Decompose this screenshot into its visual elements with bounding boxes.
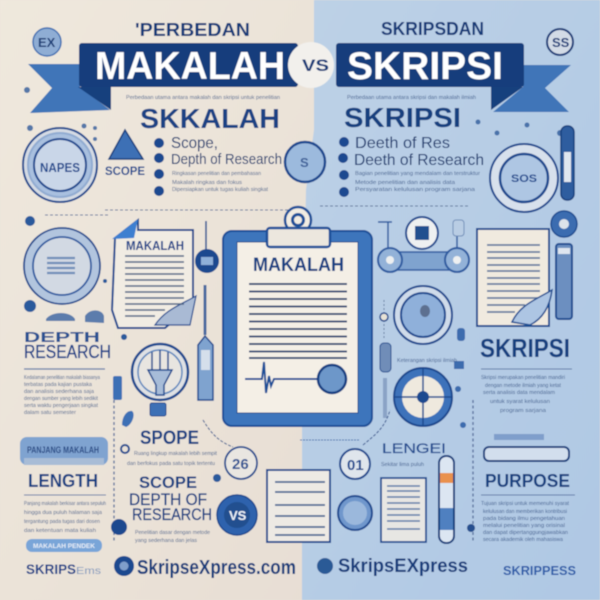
icon: clasp: [150, 403, 166, 416]
icon: tube: [198, 285, 213, 400]
icon: document: [381, 478, 426, 542]
heading: scope depth of research: DEPTH OF: [129, 490, 207, 509]
body text: Tujuan skripsi untuk memenuhi syarat: [481, 501, 570, 507]
heading: skripsi: SKRIPSI: [344, 102, 461, 133]
body text: Skripsi merupakan penelitian mandiri: [481, 375, 565, 381]
heading: scope depth of research: SCOPE: [139, 473, 197, 492]
heading: scope depth of research: RESEARCH: [132, 505, 212, 524]
bullet list: Depth of Research: [171, 151, 282, 168]
icon: bulb circle: [132, 344, 188, 400]
ribbon: right tail: [491, 65, 571, 112]
footer: right logo: SkripsEXpress: [338, 556, 468, 577]
rule: [24, 494, 106, 496]
icon: napes seal: NAPES: [40, 160, 80, 175]
bullet list: [154, 135, 282, 196]
icon: small decor: [213, 474, 221, 482]
icon: sos seal: SOS: [511, 173, 537, 185]
panel: purpose: [467, 434, 575, 543]
body text: Kedalaman penelitian makalah biasanya: [24, 375, 100, 381]
panel: right middle: [378, 211, 577, 428]
heading: purpose: PURPOSE: [485, 471, 570, 491]
body text: [481, 375, 565, 414]
body text: yang sederhana dan jelas: [135, 538, 198, 544]
footer: left logo: SkripseXpress.com: [137, 557, 296, 579]
icon: shield circle: [338, 496, 372, 530]
footer: right label: SKRIPPESS: [503, 563, 576, 578]
rule: [24, 368, 105, 370]
body text: Ruang lingkup makalah lebih sempit: [134, 451, 218, 457]
heading: scope depth of research: [129, 473, 212, 524]
background: left cream panel: [0, 0, 320, 600]
icon: tube horizontal: [484, 434, 569, 461]
rule: [481, 368, 572, 370]
icon: vs circle: VS: [229, 508, 247, 523]
icon: blob top: [122, 411, 134, 427]
icon: scope triangle: [105, 130, 145, 178]
vs badge: VS: [302, 56, 329, 75]
rule with dashes: [300, 439, 360, 441]
icon: makalah document: [112, 219, 196, 328]
body text: [127, 451, 218, 467]
icon: decorative blobs: [24, 216, 127, 340]
body text: [481, 501, 570, 543]
clipboard title: MAKALAH: [253, 255, 344, 276]
icon: napes seal: [23, 128, 97, 202]
icon: ss badge: SS: [552, 35, 570, 50]
icon: right tube: [561, 126, 574, 200]
heading: depth: DEPTH: [24, 329, 100, 346]
divider dashed right: [472, 400, 474, 543]
label: skrips: SKRIPS: [26, 561, 76, 577]
clipboard clip: [267, 207, 330, 247]
body text: dengan sumber yang lebih sedikit: [24, 396, 99, 402]
icon: right tube: [556, 244, 572, 319]
panel: header: [28, 19, 573, 113]
heading: skripsi: SKRIPSI: [480, 333, 570, 363]
icon: h badge: [406, 217, 438, 249]
body text: tergantung pada tugas dari dosen: [24, 519, 100, 525]
divider dashed left: [113, 400, 115, 543]
body text: terbatas pada kajian pustaka: [24, 382, 92, 388]
body text: pada bidang ilmu pengetahuan: [483, 516, 565, 522]
body text: [24, 375, 100, 416]
clipboard paper: [237, 242, 358, 413]
bullet list: Ringkasan penelitian dan pembahasan: [172, 171, 261, 177]
bullet list: Dipersiapkan untuk tugas kuliah singkat: [172, 187, 269, 193]
body text: hingga dua puluh halaman saja: [24, 510, 102, 516]
ecg line: [245, 362, 317, 393]
icon: 01 badge: [340, 449, 370, 479]
body text: dan ketentuan mata kuliah: [24, 528, 96, 534]
heading: perbedan: 'PERBEDAN: [135, 20, 250, 40]
bullet list: Makalah ringkas dan fokus: [172, 180, 243, 186]
rule: [481, 494, 575, 496]
body text: serta waktu pengerjaan singkat: [24, 403, 99, 409]
button: MAKALAH PENDEK: [33, 544, 96, 550]
icon: side circle: S: [300, 155, 309, 170]
body text: [24, 501, 106, 534]
dashed connector: [363, 410, 390, 445]
vs badge: [288, 42, 334, 88]
panel: scope centre: [111, 403, 257, 544]
heading: length: LENGEI: [382, 440, 446, 456]
body text: Penelitian dasar dengan metode: [135, 530, 210, 536]
heading: research: RESEARCH: [24, 342, 111, 362]
label: fade: Ems: [76, 566, 101, 577]
bullet list: Deeth of Research: [354, 152, 484, 169]
bullet list: Deeth of Res: [355, 135, 450, 152]
icon: makalah document: MAKALAH: [126, 238, 184, 253]
background: right blue panel: [302, 0, 600, 600]
bullet list: Scope,: [171, 135, 218, 152]
heading: skripsdan: SKRIPSDAN: [381, 19, 484, 39]
banner: skripsi: SKRIPSI: [347, 45, 503, 88]
bullet list: Metode penelitian dan analisis data: [355, 180, 455, 186]
icon: navy blob: [111, 519, 127, 535]
icon: 01 badge: 01: [347, 457, 364, 474]
icon: top left badge: EX: [38, 35, 56, 50]
body text: dalam satu semester: [24, 410, 76, 416]
heading: length: LENGTH: [28, 471, 98, 491]
stamp circle: [318, 365, 346, 393]
bullet list: [338, 135, 484, 197]
panel: length right: [300, 410, 454, 543]
panel: skripsi summary: [285, 102, 574, 212]
icon: data circle: [24, 228, 100, 304]
body text: dan berfokus pada satu topik tertentu: [127, 461, 215, 467]
banner: makalah: MAKALAH: [95, 45, 285, 88]
icon: vs circle: [217, 495, 257, 535]
body text: program sarjana: [500, 408, 546, 414]
panel: length left: [20, 437, 108, 577]
icon: connector bar: [378, 220, 469, 272]
icon: thermometer tube: [439, 456, 454, 543]
icon: small navy circle: [195, 221, 219, 273]
bullet list: Bagian penelitian yang mendalam dan terstruktur: [355, 171, 480, 177]
icon: small lens: [551, 211, 577, 237]
clipboard text lines: [249, 284, 347, 358]
body text: secara akademik oleh mahasiswa: [483, 537, 563, 543]
body text: melalui penelitian yang orisinal: [483, 523, 565, 529]
icon: 26 badge: [225, 447, 257, 479]
panel: depth of research left: [24, 216, 219, 416]
pill label: PANJANG MAKALAH: [27, 445, 99, 455]
body text: dengan metode ilmiah yang ketat: [485, 383, 562, 389]
bullet list: Persyaratan kelulusan program sarjana: [355, 187, 475, 193]
body text: Keterangan skripsi ilmiah: [397, 358, 457, 364]
icon: side circle: [285, 142, 325, 182]
decorative specks: [24, 87, 563, 141]
dashed connector: [203, 420, 233, 447]
connector dashes upper: [45, 206, 470, 215]
icon: top left badge: [33, 28, 61, 56]
panel: bottom document left: [267, 470, 330, 542]
icon: scope triangle: SCOPE: [105, 164, 145, 178]
body text: dan dapat dipertanggungjawabkan: [483, 530, 568, 536]
small target: [121, 445, 129, 453]
icon: sos seal: [490, 144, 558, 212]
icon: skripsi document: [477, 229, 552, 326]
body text: serta analisis data mendalam: [483, 390, 555, 396]
panel: central clipboard: [223, 207, 372, 426]
body text: dan analisis sederhana saja: [24, 389, 94, 395]
icon: target: [394, 368, 452, 426]
icon: small bottle: [113, 376, 122, 400]
heading: skkalah: SKKALAH: [140, 103, 280, 134]
body text: Panjang makalah berkisar antara sepuluh: [24, 501, 106, 507]
clipboard board: [223, 231, 372, 426]
icon: small pieces: [454, 328, 466, 428]
icon: lens circle: [394, 286, 452, 344]
heading: spope: SPOPE: [140, 428, 199, 449]
ribbon: left tail: [28, 64, 111, 113]
body text: Sekitar lima puluh: [381, 462, 424, 468]
icon: small blob: [467, 524, 475, 532]
body text: kelulusan dan memberikan kontribusi: [483, 509, 567, 515]
icon: left pin: [380, 300, 391, 418]
subtitle line left: Perbedaan utama antara makalah dan skripsi untuk penelitian: [126, 95, 280, 101]
body text: [135, 530, 210, 544]
icon: ss badge: [547, 29, 573, 55]
panel: makalah summary: [23, 103, 282, 202]
icon: 26 badge: 26: [232, 456, 249, 473]
subtitle line right: Perbedaan utama antara skripsi dan makalah ilmiah: [347, 95, 476, 101]
body text: untuk syarat kelulusan: [490, 399, 550, 405]
